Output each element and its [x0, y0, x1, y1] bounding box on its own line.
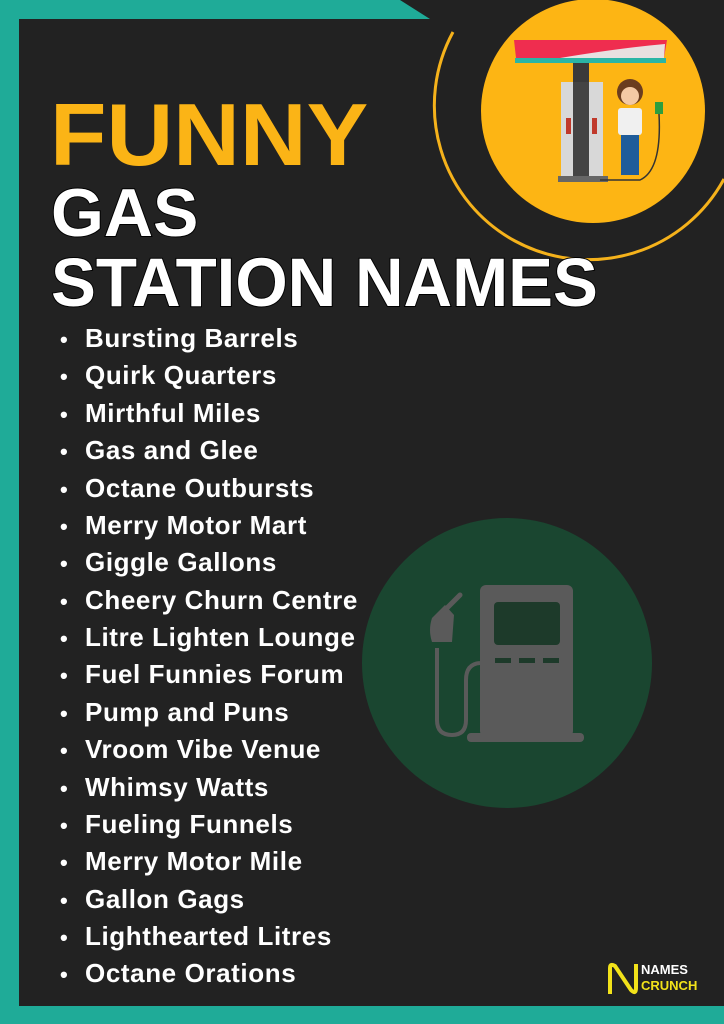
text: • [60, 327, 68, 352]
text: Quirk Quarters [85, 360, 277, 390]
text: • [60, 813, 68, 838]
title: FUNNY: FUNNY [50, 85, 368, 184]
text: • [60, 402, 68, 427]
title: GAS: GAS [51, 175, 198, 251]
text: Lighthearted Litres [85, 921, 332, 951]
text: Merry Motor Mile [85, 846, 303, 876]
text: Cheery Churn Centre [85, 585, 358, 615]
text: • [60, 477, 68, 502]
text: • [60, 925, 68, 950]
text: Octane Orations [85, 958, 296, 988]
icon: gas station illustration [481, 0, 705, 223]
icon: fuel pump in green circle [362, 518, 652, 808]
text: • [60, 701, 68, 726]
text: Mirthful Miles [85, 398, 261, 428]
text: • [60, 776, 68, 801]
text: • [60, 364, 68, 389]
text: • [60, 850, 68, 875]
text: Vroom Vibe Venue [85, 734, 321, 764]
text: Gallon Gags [85, 884, 245, 914]
text: Bursting Barrels [85, 323, 298, 353]
text: Pump and Puns [85, 697, 289, 727]
text: • [60, 626, 68, 651]
logo: Names Crunch [608, 962, 697, 994]
text: • [60, 663, 68, 688]
text: • [60, 589, 68, 614]
text: Gas and Glee [85, 435, 258, 465]
text: • [60, 439, 68, 464]
text: Whimsy Watts [85, 772, 269, 802]
text: Giggle Gallons [85, 547, 277, 577]
text: • [60, 514, 68, 539]
text: Fueling Funnels [85, 809, 293, 839]
text: Fuel Funnies Forum [85, 659, 344, 689]
text: • [60, 962, 68, 987]
text: Merry Motor Mart [85, 510, 307, 540]
title: STATION NAMES: STATION NAMES [51, 244, 598, 321]
text: Octane Outbursts [85, 473, 314, 503]
list of names [60, 323, 358, 988]
logo: Names Crunch: NAMES [641, 962, 688, 977]
logo: Names Crunch: CRUNCH [641, 978, 697, 993]
text: • [60, 738, 68, 763]
text: Litre Lighten Lounge [85, 622, 356, 652]
text: • [60, 888, 68, 913]
text: • [60, 551, 68, 576]
